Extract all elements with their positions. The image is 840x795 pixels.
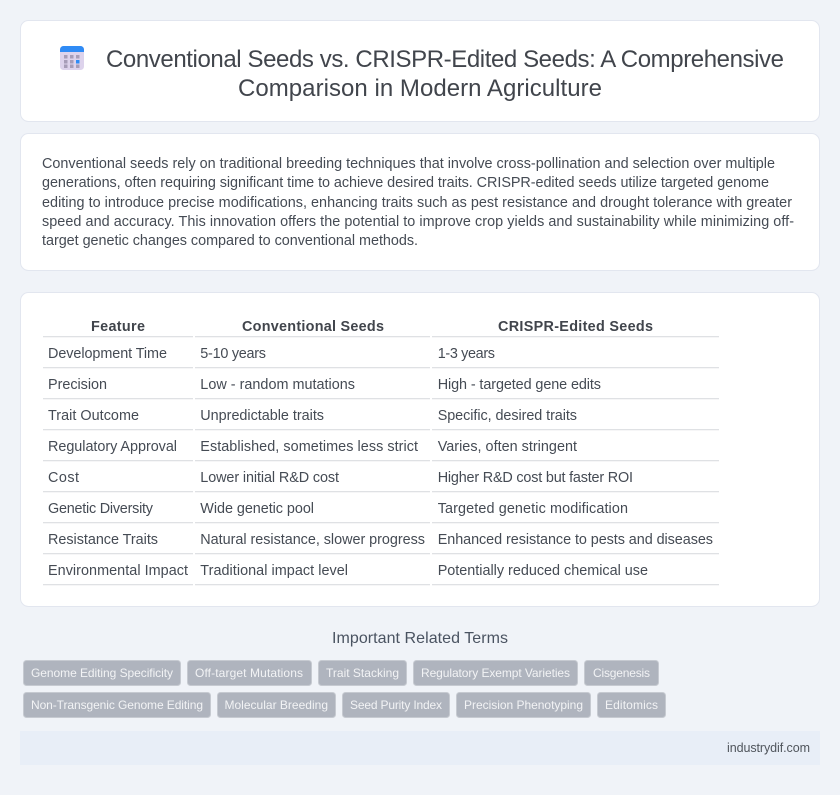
text block: introduction: Conventional seeds rely on traditional breeding techniques that involve cross-pollination and selection over multiple (42, 156, 775, 172)
table header (91, 319, 653, 335)
text block: introduction: target genetic changes compared to conventional methods. (42, 233, 418, 249)
text block: introduction (42, 156, 794, 249)
title: Conventional Seeds vs. CRISPR-Edited Seeds: A Comprehensive (106, 46, 784, 73)
tag (456, 692, 590, 718)
table header: Conventional Seeds (242, 319, 384, 335)
table row: regulatory approval: Regulatory Approval (48, 439, 177, 455)
tag: Molecular Breeding (224, 698, 328, 712)
table row: precision (48, 377, 601, 393)
title: Comparison in Modern Agriculture (238, 75, 602, 102)
table row: trait outcome: Specific, desired traits (438, 408, 577, 424)
tag (584, 660, 658, 686)
table row: environmental impact: Potentially reduced chemical use (438, 563, 648, 579)
table row: genetic diversity: Wide genetic pool (200, 501, 314, 517)
tag (24, 660, 180, 686)
table row: regulatory approval: Established, sometimes less strict (200, 439, 418, 455)
title (106, 46, 784, 102)
footer: industrydif.com (727, 741, 810, 755)
tag (188, 660, 312, 686)
table row: trait outcome: Unpredictable traits (200, 408, 324, 424)
tag (24, 692, 210, 718)
table row: development time: Development Time (48, 346, 167, 362)
table row: regulatory approval: Varies, often stringent (438, 439, 577, 455)
text block: introduction: speed and accuracy. This innovation offers the potential to improve crop yields and sustainability while minimizing off- (42, 214, 794, 230)
table row: cost: Lower initial R&D cost (200, 470, 339, 486)
table header: Feature (91, 319, 145, 335)
table row: environmental impact: Environmental Impact (48, 563, 188, 579)
table row: precision: High - targeted gene edits (438, 377, 601, 393)
tag: Seed Purity Index (350, 698, 442, 712)
text block: introduction: generations, often requiring significant time to achieve desired traits. CRISPR-edited seeds utilize targeted genome (42, 175, 769, 191)
tag: Regulatory Exempt Varieties (421, 666, 570, 680)
panel: introduction text (20, 134, 820, 270)
table row: cost (48, 470, 633, 486)
tag (318, 660, 406, 686)
table row: environmental impact: Traditional impact level (200, 563, 348, 579)
table row: genetic diversity: Targeted genetic modification (438, 501, 628, 517)
table row: development time: 5-10 years (200, 346, 266, 362)
tag (598, 692, 666, 718)
tag: Trait Stacking (326, 666, 399, 680)
footer (20, 731, 820, 765)
tag: Editomics (605, 698, 658, 712)
tag (342, 692, 450, 718)
table row: precision: Precision (48, 377, 107, 393)
heading: related terms: Important Related Terms (332, 630, 508, 647)
panel: comparison table (20, 292, 820, 606)
table row: trait outcome (48, 408, 577, 424)
tag list: related terms (24, 660, 666, 718)
tag: Off-target Mutations (195, 666, 303, 680)
tag: Non-Transgenic Genome Editing (31, 698, 203, 712)
table header: CRISPR-Edited Seeds (498, 319, 653, 335)
tag (218, 692, 336, 718)
table row: precision: Low - random mutations (200, 377, 355, 393)
table row: resistance traits (48, 532, 713, 548)
tag (414, 660, 578, 686)
tag: Genome Editing Specificity (31, 666, 173, 680)
table row: development time: 1-3 years (438, 346, 495, 362)
table row: cost: Higher R&D cost but faster ROI (438, 470, 633, 486)
panel: title card (20, 20, 820, 122)
table row: environmental impact (48, 563, 648, 579)
tag: Precision Phenotyping (464, 698, 583, 712)
tag: Cisgenesis (593, 666, 650, 680)
table row: genetic diversity: Genetic Diversity (48, 501, 154, 517)
table row: trait outcome: Trait Outcome (48, 408, 139, 424)
table row: regulatory approval (48, 439, 577, 455)
icon: calendar (60, 46, 84, 70)
text block: introduction: editing to introduce precise modifications, enhancing traits such as pest resistance and drought tolerance with greater (42, 195, 792, 211)
table row: cost: Cost (48, 470, 79, 486)
table row: genetic diversity (48, 501, 628, 517)
table row: resistance traits: Enhanced resistance to pests and diseases (438, 532, 713, 548)
table row: resistance traits: Natural resistance, slower progress (200, 532, 425, 548)
table row: development time (48, 346, 495, 362)
table row: resistance traits: Resistance Traits (48, 532, 158, 548)
